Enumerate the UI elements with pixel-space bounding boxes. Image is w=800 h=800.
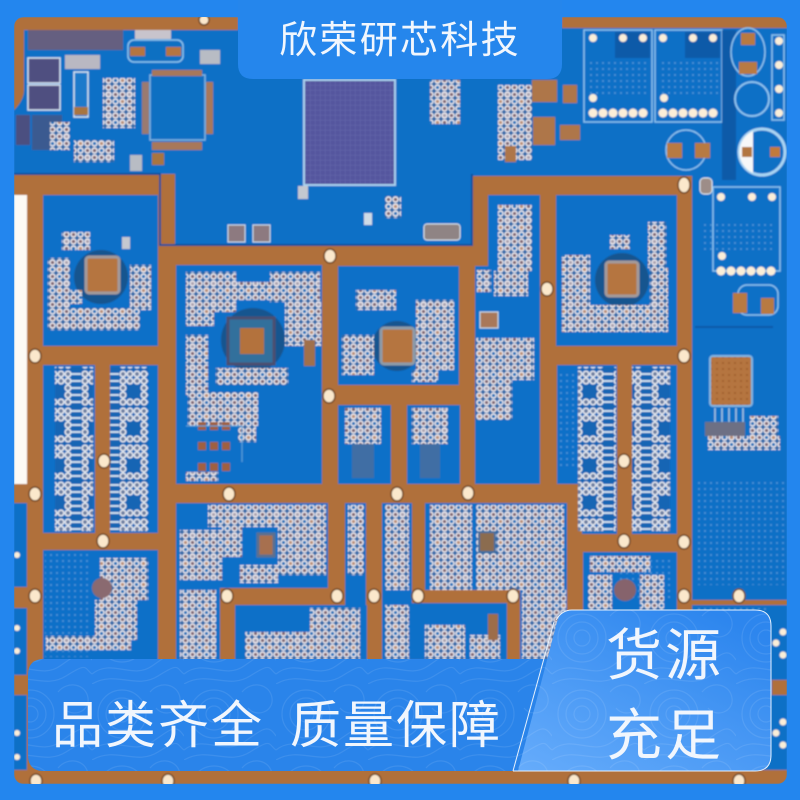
bottom left cell components [46,558,148,650]
title text: 欣荣研芯科技 [279,20,521,62]
feature text: 品类齐全 [52,697,264,754]
edge connector pads [14,552,786,760]
callout text line 2: 充足 [606,704,724,767]
blue solder mask top region [14,17,787,600]
capacitors top right [666,28,785,194]
bottom row left cell components [180,505,360,660]
dark mask edge of upper region [14,174,472,245]
QFN cell top left [48,232,151,330]
right lower edge strip [692,605,787,770]
title banner [238,0,562,79]
small parts centre top [228,80,580,242]
bottom row narrow columns [348,505,409,660]
QFN cell centre left [186,272,321,481]
stock callout panel [513,610,771,771]
bottom feature bar [28,659,560,771]
dotted via fields [45,58,785,657]
panel cells [43,195,677,665]
small cells with components [345,408,448,478]
top right power modules [584,30,783,122]
callout text line 1: 货源 [606,624,724,687]
bottom right cell components [588,556,664,610]
QFN cell top right [562,222,668,332]
lower right copper pad chip [705,356,780,450]
feature text: 质量保障 [290,697,502,754]
right connector module [695,187,780,328]
dark solder halos around chips [74,250,649,372]
left edge white slot [14,195,27,484]
memory columns [55,367,670,531]
QFN cell centre [342,290,454,382]
BGA chip centre [304,80,395,185]
QFP chip top left [142,70,213,150]
top left connectors [16,30,220,171]
tall cell components [476,205,534,420]
bottom row right cell components [425,505,566,660]
left lower edge strip [14,503,27,770]
